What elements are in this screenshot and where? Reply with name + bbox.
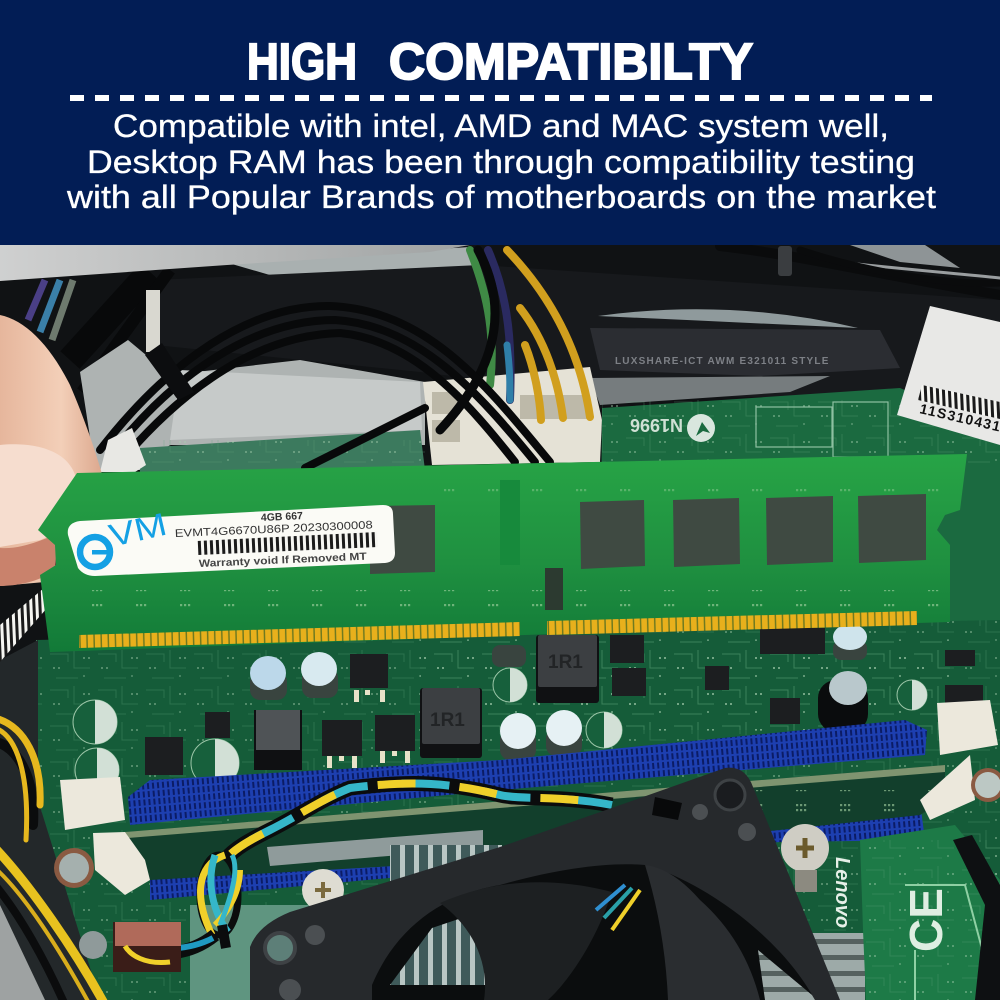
upper right motherboard xyxy=(600,388,1000,640)
fins seen through the fan xyxy=(390,905,500,985)
lower motherboard xyxy=(36,620,1000,1000)
secondary board seen behind cables xyxy=(140,430,425,472)
RAM slots and second module xyxy=(60,700,998,900)
title: COMPATIBILTY xyxy=(389,33,753,90)
wires behind fan blades xyxy=(596,885,640,930)
header banner xyxy=(0,0,1000,245)
fan connector xyxy=(113,922,181,972)
PCB xyxy=(38,454,967,652)
fins seen at fan right xyxy=(758,950,815,1000)
EVM logo: VM xyxy=(105,506,170,554)
solder via bands xyxy=(60,590,940,608)
black chips and regulators xyxy=(145,628,983,775)
top right thick cables xyxy=(720,246,1000,295)
grey chassis, bottom left xyxy=(0,905,45,1000)
power block xyxy=(254,710,302,770)
description text: with all Popular Brands of motherboards on the market xyxy=(66,179,936,215)
dashed divider xyxy=(70,95,932,101)
fan wires, blue yellow black twisted rope with knot xyxy=(128,784,612,953)
pale trace area near fan connector xyxy=(190,905,310,1000)
memory chips xyxy=(370,494,926,574)
white connector xyxy=(423,367,602,465)
silkscreen logo and N1996 xyxy=(630,414,715,442)
connector sockets xyxy=(432,392,590,442)
metal chassis area xyxy=(80,340,425,470)
second memory module xyxy=(125,765,945,880)
EVM warranty sticker xyxy=(68,505,395,576)
gold edge contacts xyxy=(79,622,520,648)
inductors xyxy=(420,635,599,758)
grey ribbon cable with printing: LUXSHARE-ICT AWM E321011 STYLE xyxy=(615,356,830,367)
light panel behind rail xyxy=(225,247,475,278)
silver strip below ribbon xyxy=(590,376,830,405)
screws xyxy=(54,768,1000,911)
capacitors and components xyxy=(73,624,983,792)
EVM logo xyxy=(80,506,170,567)
EVM warranty sticker: 4GB 667 xyxy=(261,510,303,524)
photo: memory module being installed on a motherboard xyxy=(0,245,1000,1000)
lower board circuit traces xyxy=(36,620,1000,1000)
flat black cable bundle xyxy=(155,265,1000,400)
description text: Desktop RAM has been through compatibility testing xyxy=(87,144,915,180)
chassis rail xyxy=(0,245,470,281)
CPU cooler fan xyxy=(250,768,840,1000)
barcode sticker, top right xyxy=(897,306,1000,445)
description text xyxy=(66,108,936,215)
fan blades xyxy=(440,882,612,1000)
inductors: 1R1 xyxy=(430,710,465,731)
mounting holes xyxy=(265,780,756,1000)
board silkscreen and right edge xyxy=(831,825,1000,1000)
power cables xyxy=(440,250,590,430)
cable tie xyxy=(145,343,194,400)
grey panel top right xyxy=(850,245,960,268)
grey ribbon cable with printing xyxy=(590,328,900,376)
lit gap between ribbon cables xyxy=(598,309,858,328)
title: HIGH xyxy=(247,33,357,90)
white retention clips xyxy=(60,700,998,895)
MOSFET pins xyxy=(327,690,410,768)
white nylon post xyxy=(146,290,160,352)
electrolytic capacitors xyxy=(250,624,868,760)
via column xyxy=(500,480,520,565)
small SPD chip xyxy=(545,568,563,610)
EVM warranty sticker: EVMT4G6670U86P 20230300008 xyxy=(175,519,373,540)
hand holding the module xyxy=(0,315,102,586)
black looped cables xyxy=(100,306,550,468)
module edge sticker on left xyxy=(0,588,54,662)
silkscreen logo and N1996: N1996 xyxy=(630,415,683,435)
EVM warranty sticker: Warranty void If Removed MT xyxy=(199,551,368,570)
half white capacitor footprints xyxy=(73,668,927,792)
inductors: 1R1 xyxy=(548,652,583,673)
heatsink fins xyxy=(390,845,865,1000)
description text: Compatible with intel, AMD and MAC system well, xyxy=(113,108,889,144)
small capacitor near connector xyxy=(79,931,107,959)
RAM module xyxy=(38,454,967,652)
side cable bundle with purple and blue wires xyxy=(28,270,170,392)
board silkscreen and right edge: CE xyxy=(900,888,952,952)
white tag near hand xyxy=(100,428,146,472)
board silkscreen and right edge: Lenovo xyxy=(831,857,853,928)
left edge cables and chassis xyxy=(0,640,100,1000)
cable tie, top right xyxy=(778,246,792,276)
